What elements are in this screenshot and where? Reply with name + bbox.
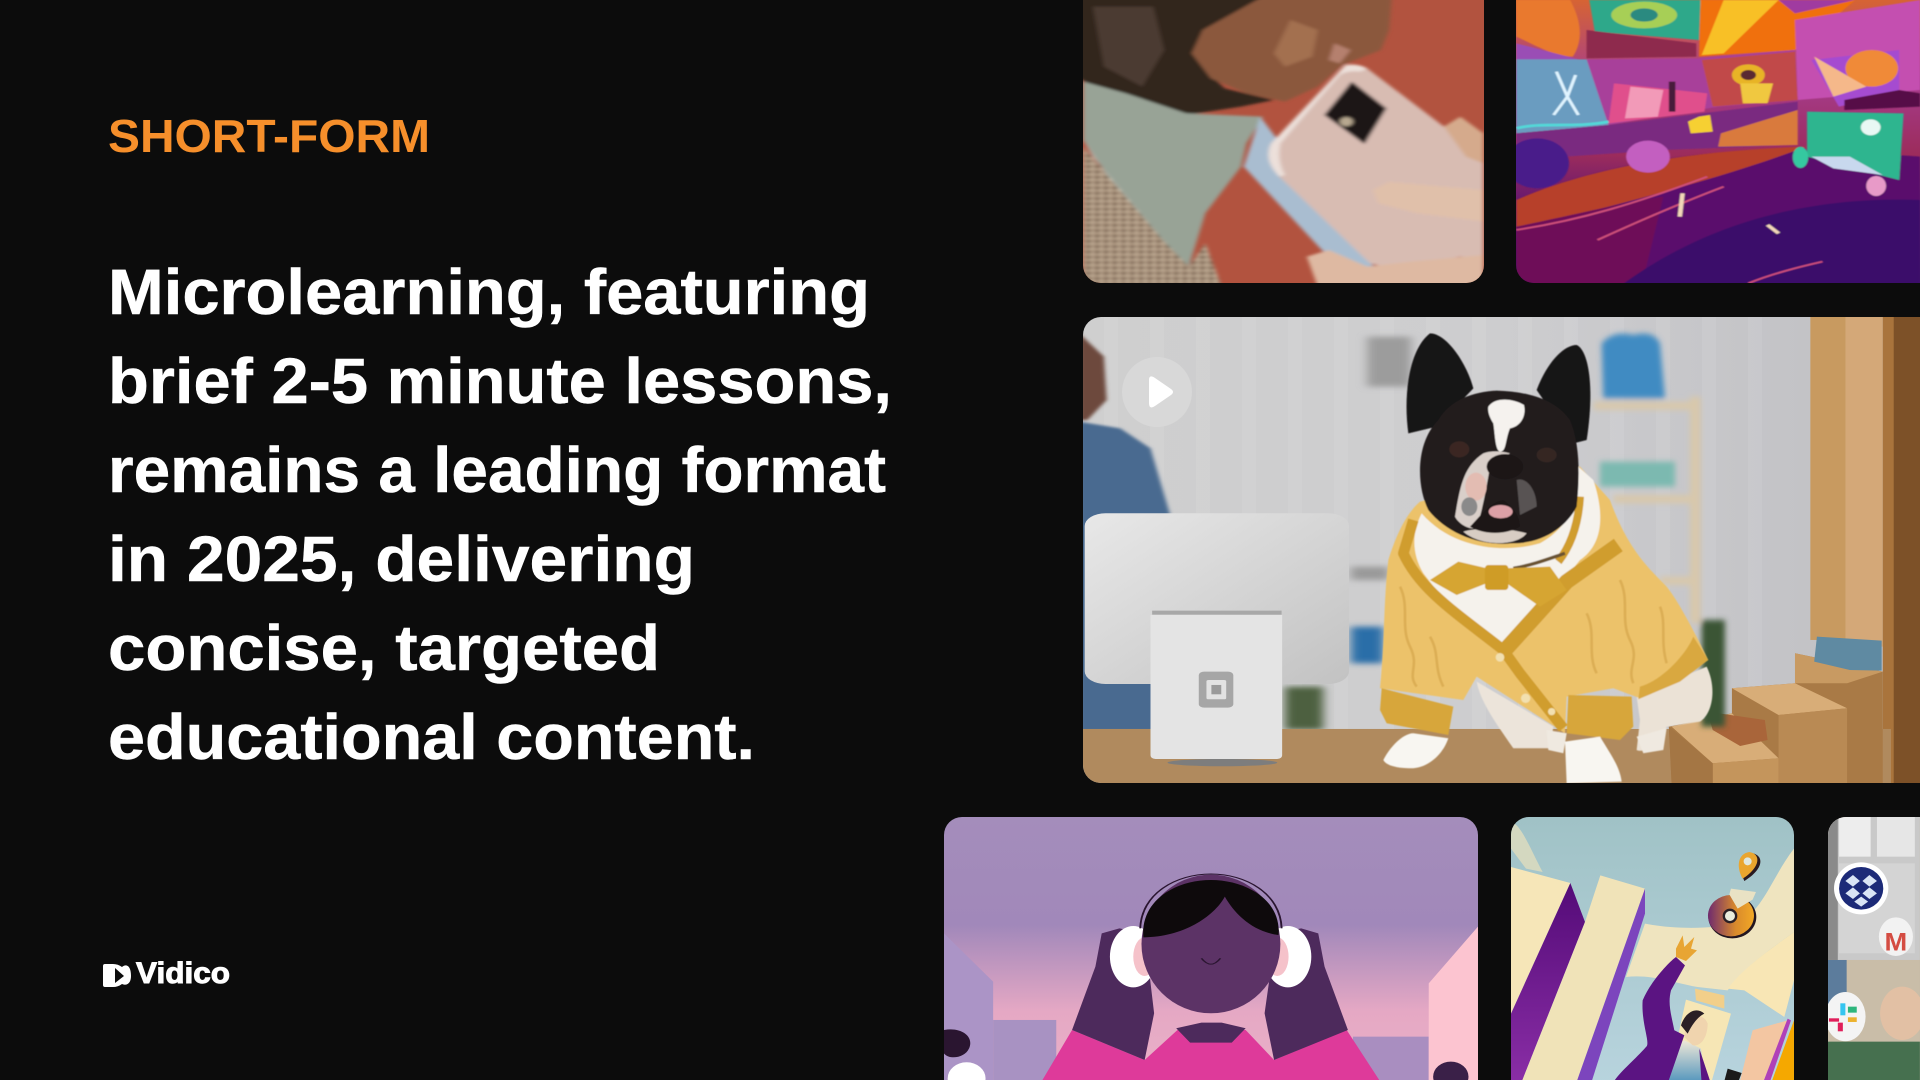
neck bbox=[1176, 1023, 1246, 1043]
French bulldog bbox=[1380, 333, 1712, 783]
panel: city and map-pin illustration bbox=[1511, 817, 1794, 1080]
desk bbox=[1079, 729, 1891, 784]
streaks bbox=[1516, 177, 1822, 283]
band below bbox=[1516, 102, 1798, 160]
heading text block: remains a leading format bbox=[108, 434, 886, 506]
hair bbox=[1076, 0, 1279, 115]
cream swoosh bbox=[1626, 849, 1794, 990]
right-hand blocks bbox=[1739, 1020, 1788, 1080]
orange and yellow burst bbox=[1699, 0, 1855, 57]
heading text block: educational content. bbox=[108, 701, 755, 773]
blurred shop background bbox=[1285, 337, 1411, 730]
green swirl panel bbox=[1589, 0, 1701, 40]
pink right panel bbox=[1795, 0, 1920, 100]
golden hand bbox=[1732, 64, 1765, 86]
folder building bbox=[1668, 989, 1731, 1080]
sleeve hem bbox=[1638, 637, 1708, 699]
bow tie bbox=[1430, 562, 1567, 607]
headband bbox=[1140, 874, 1282, 928]
smile bbox=[1201, 958, 1220, 964]
leather collar bbox=[1711, 714, 1768, 746]
icon: logo play mark bbox=[103, 964, 131, 987]
panel: headphones illustration bbox=[944, 817, 1478, 1080]
ears bbox=[1407, 333, 1473, 433]
green sofa bbox=[1828, 1042, 1920, 1080]
deer bbox=[1554, 72, 1578, 115]
haunch bbox=[1637, 667, 1712, 751]
teal panel bbox=[1807, 112, 1904, 180]
person sleeve and arm bbox=[1613, 957, 1685, 1080]
panel: colourful illustrated gallery bbox=[1505, 0, 1920, 287]
muzzle bbox=[1455, 451, 1510, 529]
middle band panels bbox=[1587, 50, 1798, 125]
upper-left orange curve bbox=[1516, 0, 1580, 57]
heading text block bbox=[108, 256, 892, 773]
mouth bbox=[1470, 500, 1520, 533]
lilac domes bbox=[1516, 138, 1570, 189]
logo: Vidico bbox=[103, 957, 230, 990]
nose bbox=[1487, 454, 1523, 479]
left side figure bbox=[944, 1029, 970, 1057]
icon: Slack badge bbox=[1825, 992, 1866, 1041]
shirt bbox=[1040, 1030, 1381, 1080]
blaze bbox=[1488, 400, 1525, 452]
deep purple floor bbox=[1616, 150, 1920, 268]
icon: Gmail badge: M bbox=[1885, 928, 1907, 956]
person head bbox=[1684, 1016, 1708, 1045]
second tower bbox=[1521, 875, 1645, 1080]
heading text block: brief 2-5 minute lessons, bbox=[108, 345, 892, 417]
cable knit bbox=[1400, 580, 1667, 687]
window bbox=[1828, 817, 1920, 960]
map pin bbox=[1739, 852, 1760, 881]
cardigan bbox=[1380, 467, 1708, 733]
category label: short-form: SHORT-FORM bbox=[108, 110, 430, 162]
panel: French bulldog video still bbox=[1079, 317, 1920, 784]
fingers bbox=[1444, 117, 1483, 163]
camera bbox=[1324, 82, 1386, 144]
icon: play button bbox=[1122, 357, 1192, 427]
right side figure bbox=[1433, 1062, 1468, 1080]
person hand bbox=[1676, 935, 1697, 961]
wooden steps bbox=[1669, 653, 1883, 783]
phone case side bbox=[1241, 116, 1376, 268]
pale wedge bbox=[1511, 822, 1543, 872]
left tower bbox=[1511, 867, 1570, 1014]
icon: Gmail badge bbox=[1879, 917, 1913, 956]
head bbox=[1420, 391, 1579, 544]
head bbox=[1141, 875, 1280, 1013]
paws bbox=[1383, 733, 1448, 768]
buttons bbox=[1496, 653, 1504, 662]
belly bbox=[1477, 682, 1553, 748]
panel: app integrations photo bbox=[1825, 817, 1920, 1080]
woven rug bbox=[1083, 147, 1222, 287]
person in blue behind terminal bbox=[1079, 333, 1170, 740]
chin bbox=[1463, 529, 1527, 543]
heading text block: Microlearning, featuring bbox=[108, 256, 870, 328]
collar bbox=[1513, 553, 1565, 568]
face bbox=[1192, 0, 1392, 102]
hands bbox=[1072, 928, 1154, 1060]
wooden frame bbox=[1810, 317, 1847, 640]
phone bbox=[1268, 65, 1483, 270]
blurred room bbox=[1828, 960, 1920, 1043]
blurred shelf behind dog bbox=[1593, 334, 1725, 727]
square logo bbox=[1199, 672, 1233, 708]
left buildings bbox=[944, 933, 993, 1080]
terminal stand bbox=[1151, 615, 1282, 759]
person shirt bbox=[1668, 1040, 1706, 1080]
hair bbox=[1143, 880, 1279, 937]
cardigan trim bbox=[1403, 520, 1563, 728]
chessboard bbox=[1608, 83, 1707, 123]
wordmark: Vidico bbox=[136, 957, 230, 990]
plaid collar bbox=[1814, 637, 1882, 671]
white chest bbox=[1414, 467, 1600, 647]
donut chart bbox=[1708, 889, 1756, 938]
eyes bbox=[1449, 441, 1469, 457]
panel: woman with phone photo bbox=[1076, 0, 1484, 287]
rear paws bbox=[1547, 728, 1667, 753]
icon: Dropbox badge bbox=[1834, 862, 1888, 914]
heading text block: concise, targeted bbox=[108, 612, 660, 684]
pillow bbox=[1083, 82, 1263, 267]
ear cups bbox=[1110, 926, 1157, 987]
heading text block: in 2025, delivering bbox=[108, 523, 695, 595]
right buildings bbox=[1353, 1037, 1429, 1080]
cuffs bbox=[1380, 688, 1453, 735]
terminal screen back bbox=[1085, 513, 1349, 684]
